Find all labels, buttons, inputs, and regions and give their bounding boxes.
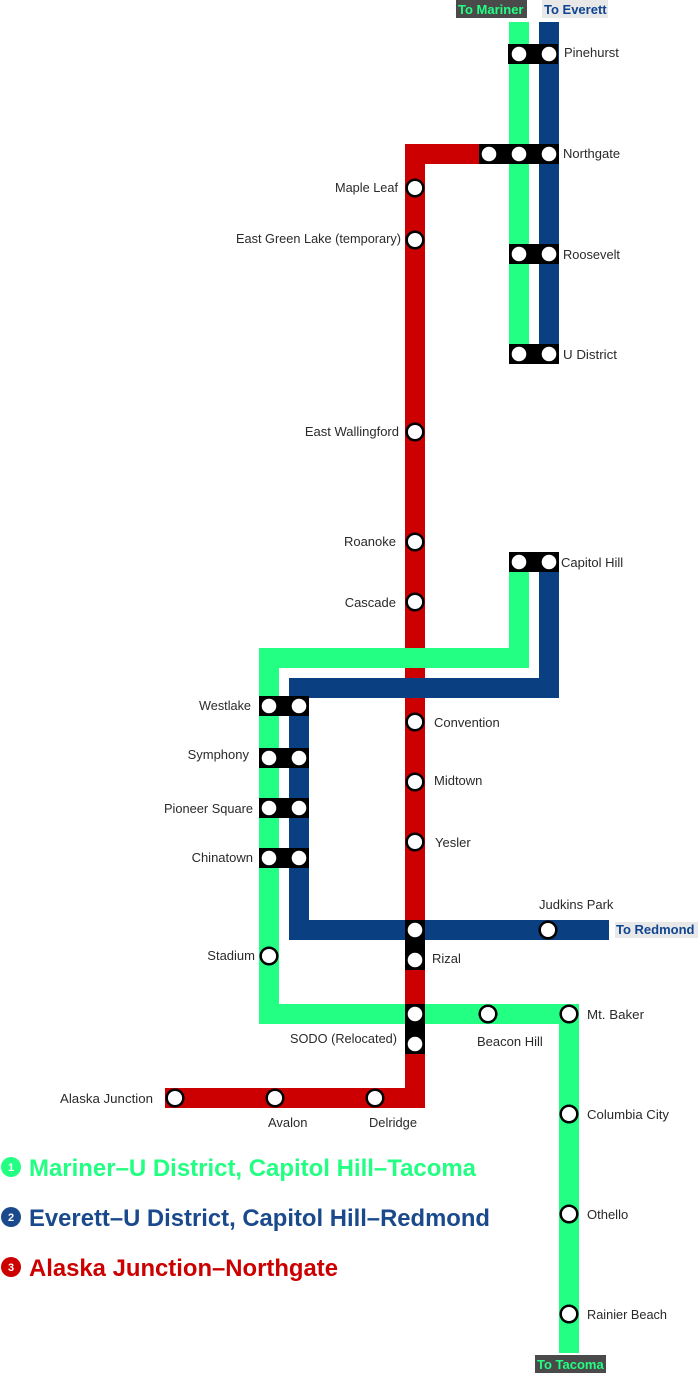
station bars: transfer stations — [259, 44, 559, 1054]
terminus label: To Redmond: To Redmond — [616, 922, 695, 937]
station labels: East Wallingford — [305, 424, 399, 439]
terminus label: To Everett: To Everett — [544, 2, 607, 17]
station labels: Rizal — [432, 951, 461, 966]
station labels: Convention — [434, 715, 500, 730]
legend item: line 2: Everett–U District, Capitol Hill–Redmond — [29, 1205, 490, 1232]
station labels: Delridge — [369, 1115, 417, 1130]
line 3: Alaska Junction to Northgate (red) — [165, 154, 480, 1098]
station labels: Pioneer Square — [164, 801, 253, 816]
station markers: single-line stations — [167, 180, 577, 1322]
legend item: line 1: Mariner–U District, Capitol Hill–Tacoma — [29, 1155, 477, 1182]
station labels: U District — [563, 347, 617, 362]
station labels: Symphony — [188, 747, 249, 762]
station labels: Avalon — [268, 1115, 308, 1130]
station labels: Yesler — [435, 835, 471, 850]
line 1 north: Mariner to U District (green) — [509, 22, 529, 354]
line 1 south: Capitol Hill to Tacoma (green) — [269, 562, 569, 1353]
station labels: Maple Leaf — [335, 180, 398, 195]
line 2 south: Capitol Hill to Redmond (blue) — [299, 562, 609, 930]
station labels: Alaska Junction — [60, 1091, 153, 1106]
station labels: Roanoke — [344, 534, 396, 549]
station markers on transfer bars — [262, 47, 556, 1051]
station labels: Chinatown — [192, 850, 253, 865]
terminus label: To Tacoma: To Tacoma — [537, 1357, 604, 1372]
station labels: Stadium — [207, 948, 255, 963]
station labels: Beacon Hill — [477, 1034, 543, 1049]
station labels: Westlake — [199, 698, 251, 713]
station labels: Rainier Beach — [587, 1307, 667, 1322]
legend item: line 2: 2 — [8, 1212, 14, 1224]
station labels: SODO (Relocated) — [290, 1031, 397, 1046]
station labels: Northgate — [563, 146, 620, 161]
station labels: Midtown — [434, 773, 482, 788]
station labels: East Green Lake (temporary) — [236, 231, 401, 246]
legend item: line 1: 1 — [8, 1162, 14, 1174]
station labels: Mt. Baker — [587, 1007, 645, 1022]
terminus label: To Mariner: To Mariner — [458, 2, 524, 17]
station labels: Judkins Park — [539, 897, 614, 912]
station labels: Cascade — [345, 595, 396, 610]
station labels: Pinehurst — [564, 45, 619, 60]
legend item: line 3: 3 — [8, 1262, 14, 1274]
station labels: Othello — [587, 1207, 628, 1222]
legend — [1, 1155, 490, 1282]
line 2 north: Everett to U District (blue) — [539, 22, 559, 354]
station labels: Roosevelt — [563, 247, 620, 262]
station labels: Columbia City — [587, 1107, 669, 1122]
legend item: line 3: Alaska Junction–Northgate — [29, 1255, 338, 1282]
station labels: Capitol Hill — [561, 555, 623, 570]
